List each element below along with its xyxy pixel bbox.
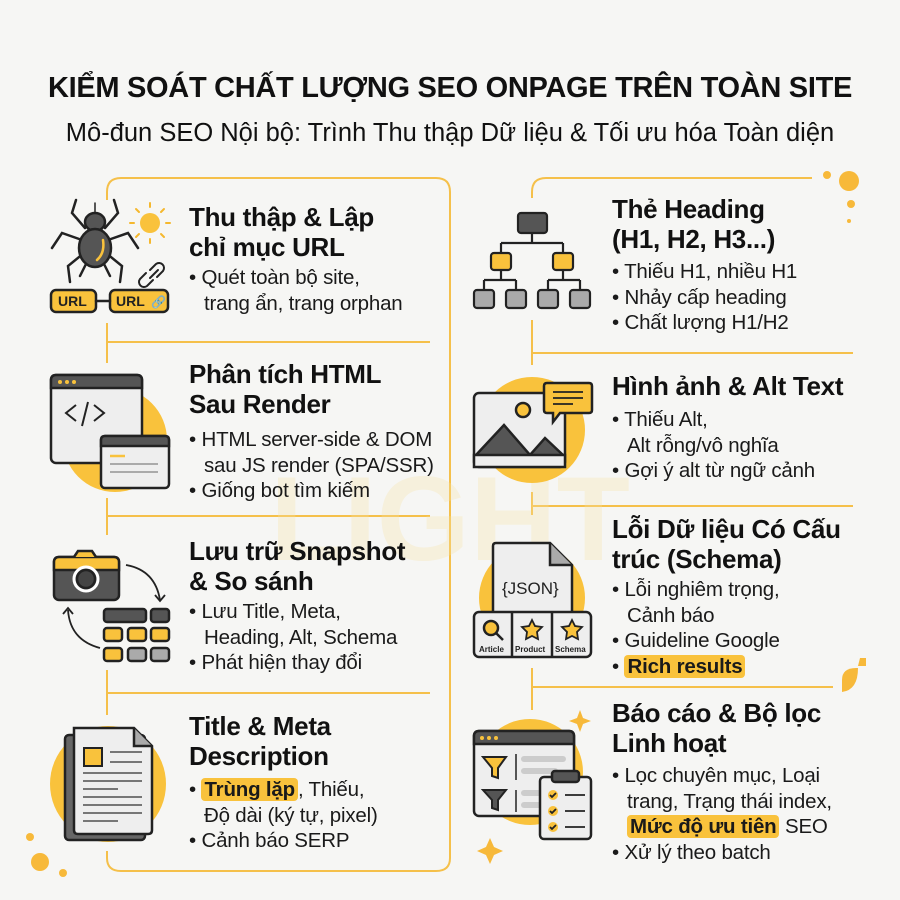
text: report bullets: • Lọc chuyên mục, Loại: [612, 764, 820, 787]
text: report bullets: [612, 764, 832, 864]
text: report bullets: • Xử lý theo batch: [612, 840, 771, 864]
text: schema bullets: Cảnh báo: [627, 604, 714, 626]
panel: snapshot heading: & So sánh: [189, 566, 313, 596]
text: html bullets: • HTML server-side & DOM: [189, 428, 432, 451]
text: heading bullets: • Nhảy cấp heading: [612, 286, 787, 308]
panel: report heading: Báo cáo & Bộ lọc: [612, 698, 821, 728]
text: image alt bullets: • Gợi ý alt từ ngữ cảnh: [612, 459, 815, 482]
panel: snapshot heading: Lưu trữ Snapshot: [189, 536, 405, 566]
text: crawl bullets: [189, 266, 402, 314]
subtitle: Mô-đun SEO Nội bộ: Trình Thu thập Dữ liệu & Tối ưu hóa Toàn diện: [66, 119, 834, 147]
panel: heading tags heading: Thẻ Heading: [612, 194, 765, 224]
panel: crawl heading: [189, 202, 374, 262]
text: snapshot bullets: Heading, Alt, Schema: [204, 626, 397, 648]
text: schema bullets: [612, 578, 780, 678]
text: snapshot bullets: • Phát hiện thay đổi: [189, 651, 362, 674]
text: html bullets: sau JS render (SPA/SSR): [204, 454, 434, 476]
panel: image alt heading: Hình ảnh & Alt Text: [612, 371, 843, 401]
panel: report heading: Linh hoạt: [612, 728, 726, 758]
text: crawl bullets: trang ẩn, trang orphan: [204, 292, 402, 314]
icon: spider crawler with URLs: 🔗: [151, 294, 166, 309]
text: image alt bullets: Alt rỗng/vô nghĩa: [627, 434, 779, 456]
panel: heading tags heading: [612, 194, 775, 254]
text: html bullets: • Giống bot tìm kiếm: [189, 479, 370, 502]
panel: schema heading: trúc (Schema): [612, 544, 781, 574]
icon: json schema: {JSON}: [502, 579, 559, 598]
panel: report heading: [612, 698, 821, 758]
panel: schema heading: Lỗi Dữ liệu Có Cấu: [612, 514, 841, 544]
icon: spider crawler with URLs: URL: [58, 293, 87, 309]
icon: json schema: Product: [515, 645, 546, 654]
panel: snapshot heading: [189, 536, 406, 596]
text: heading bullets: [612, 260, 797, 334]
text: schema bullets: • Lỗi nghiêm trọng,: [612, 578, 779, 601]
icon: json schema: Schema: [555, 645, 586, 654]
panel: html heading: [189, 359, 381, 419]
text: snapshot bullets: [189, 600, 398, 674]
icon: spider crawler with URLs: URL: [116, 293, 145, 309]
panel: title meta heading: Description: [189, 741, 329, 771]
panel: html heading: Sau Render: [189, 389, 330, 419]
text: title meta bullets: Độ dài (ký tự, pixel): [204, 804, 378, 826]
icon: json schema: Article: [479, 645, 504, 654]
text: snapshot bullets: • Lưu Title, Meta,: [189, 600, 341, 623]
panel: title meta heading: [189, 711, 332, 771]
text: title meta bullets: [189, 778, 378, 852]
text: schema bullets: • Guideline Google: [612, 629, 780, 652]
text: heading bullets: • Thiếu H1, nhiều H1: [612, 260, 797, 283]
text: image alt bullets: • Thiếu Alt,: [612, 408, 708, 431]
panel: crawl heading: Thu thập & Lập: [189, 202, 374, 232]
text: image alt bullets: [612, 408, 815, 482]
background frames and dividers: LIGHT: [270, 452, 630, 586]
text: crawl bullets: • Quét toàn bộ site,: [189, 266, 360, 289]
text: report bullets: trang, Trạng thái index,: [627, 790, 832, 812]
text: title meta bullets: • Cảnh báo SERP: [189, 829, 349, 852]
panel: crawl heading: chỉ mục URL: [189, 232, 345, 262]
text: heading bullets: • Chất lượng H1/H2: [612, 311, 789, 334]
text: schema bullets: • Rich results: [612, 654, 742, 678]
panel: title meta heading: Title & Meta: [189, 711, 331, 741]
text: title meta bullets: • Trùng lặp, Thiếu,: [189, 778, 364, 801]
text: report bullets: Mức độ ưu tiên SEO: [630, 815, 828, 838]
panel: schema heading: [612, 514, 841, 574]
panel: heading tags heading: (H1, H2, H3...): [612, 224, 775, 254]
title: KIỂM SOÁT CHẤT LƯỢNG SEO ONPAGE TRÊN TOÀN SITE: [48, 72, 852, 104]
panel: html heading: Phân tích HTML: [189, 359, 381, 389]
text: html bullets: [189, 428, 434, 502]
